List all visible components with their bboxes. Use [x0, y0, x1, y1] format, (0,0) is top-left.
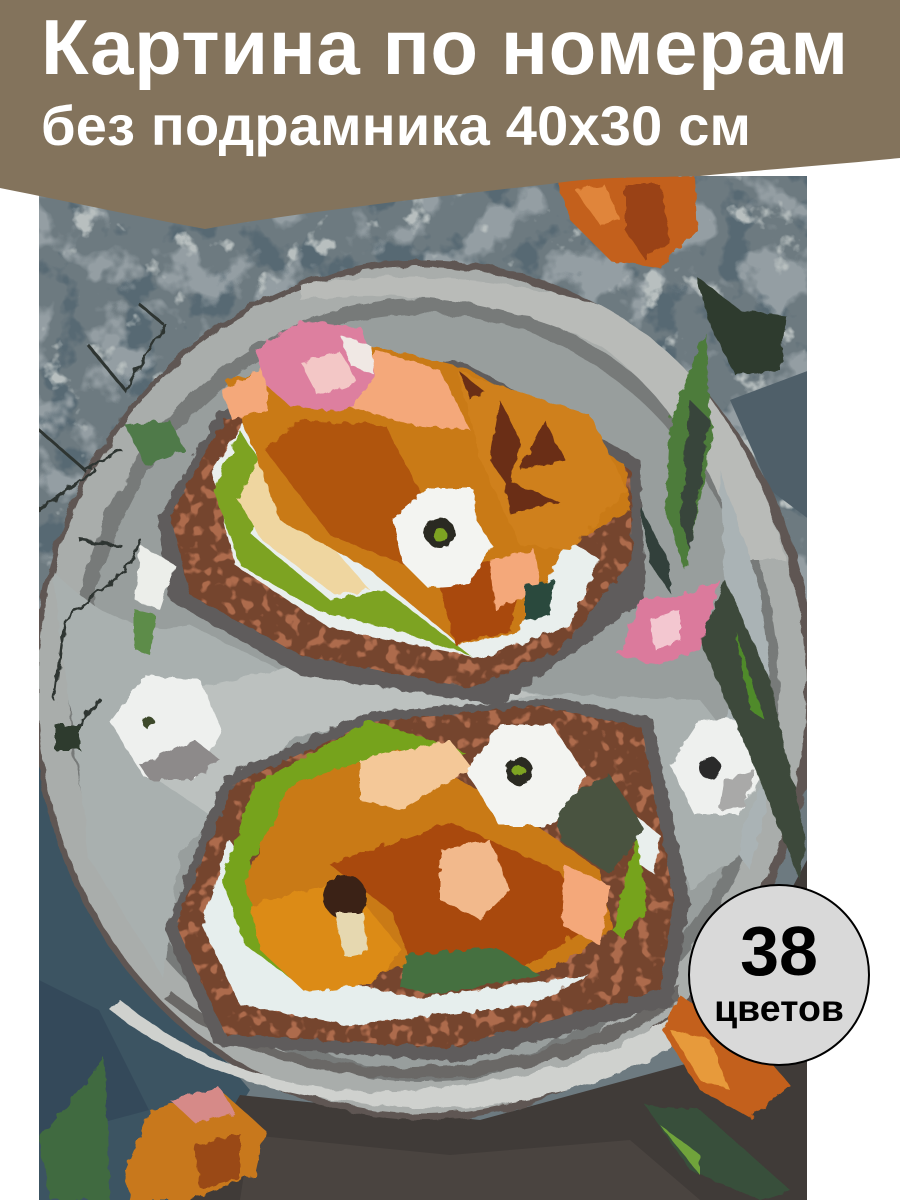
tulips: [125, 176, 790, 1200]
plate: [32, 260, 816, 1120]
leaf bottom right: [645, 1105, 790, 1200]
leaves and twigs: [39, 275, 806, 1200]
flower: white centre: [392, 488, 492, 588]
avocado: [222, 720, 465, 985]
flower: white on toast: [466, 725, 586, 826]
tulip: bottom right: [662, 995, 790, 1118]
subtitle: без подрамника 40х30 см: [41, 94, 751, 157]
leaf: dark upper right: [695, 275, 785, 375]
bread crust: [170, 370, 632, 688]
bread crust: [176, 706, 674, 1048]
bottom toast: [165, 698, 690, 1062]
orange fruit: [245, 750, 612, 990]
twigs left: [39, 305, 165, 745]
flower: pink: [256, 320, 376, 412]
avocado: [214, 430, 470, 655]
table background: [38, 176, 810, 1200]
toast shadow: [158, 360, 645, 705]
title: Картина по номерам: [41, 3, 849, 91]
tulip: top: [555, 176, 697, 268]
cream: [212, 423, 600, 658]
tulip: bottom left: [125, 1090, 265, 1200]
flower: right pom-pom: [670, 718, 765, 815]
cream: [202, 840, 590, 1025]
flower: pink right: [618, 580, 720, 665]
leaf: lower right: [700, 580, 806, 880]
crust speckle: [160, 360, 640, 690]
badge label: цветов: [714, 987, 844, 1029]
white pom-pom flowers: [110, 580, 765, 815]
toast shadow: [165, 698, 690, 1062]
badge: 38 colours: [688, 884, 870, 1066]
crust speckle: [170, 700, 680, 1050]
top toast: [158, 320, 645, 705]
flower: left pom-pom: [110, 675, 222, 778]
leaf bottom left: [39, 1058, 110, 1200]
herbs on toast: [555, 775, 645, 875]
small leaves left: [125, 420, 185, 465]
avocado slice dark: [400, 947, 540, 995]
header banner: [0, 0, 900, 229]
badge number: 38: [740, 912, 818, 990]
leaf: tall green: [665, 332, 712, 570]
orange fruit: [225, 345, 630, 645]
